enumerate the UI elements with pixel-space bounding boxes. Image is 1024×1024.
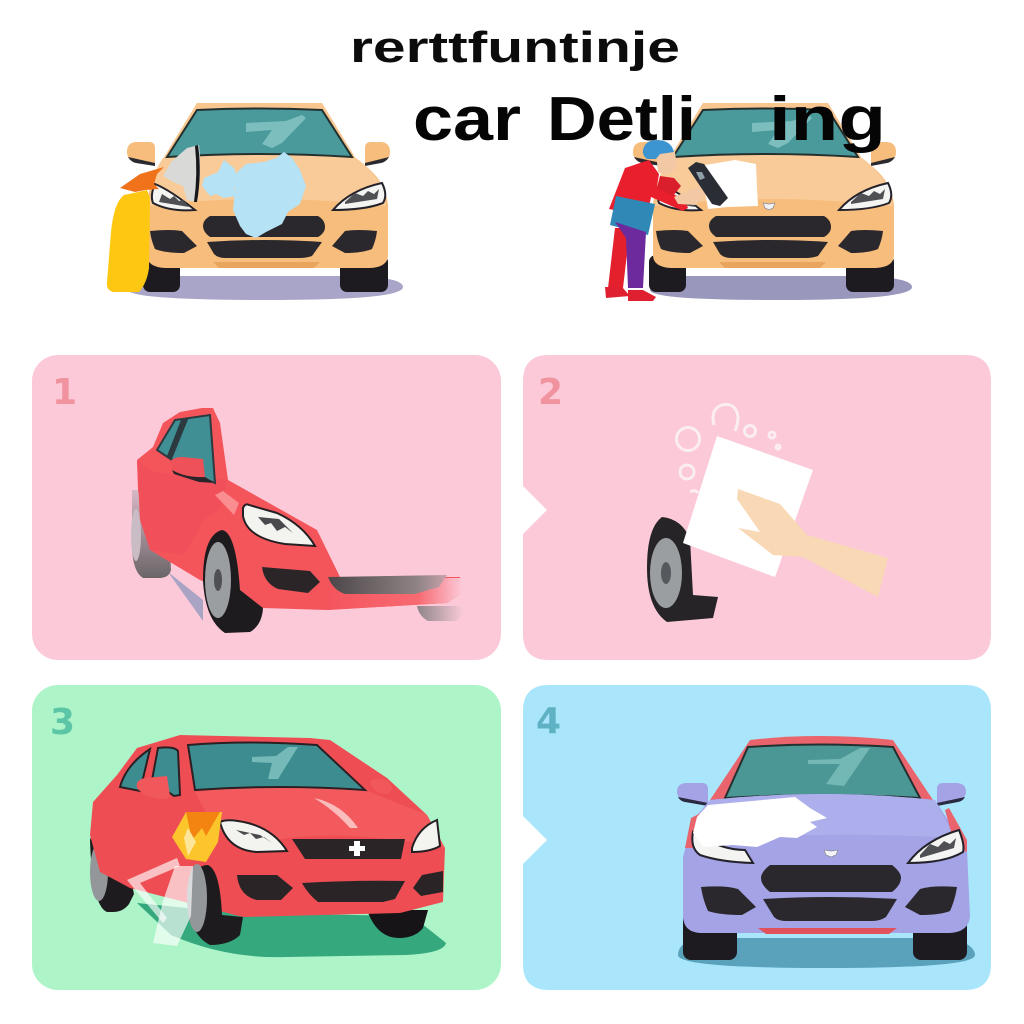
panel: step 3 bbox=[32, 685, 501, 990]
illustration: red car side bbox=[131, 408, 462, 633]
icon: spray bottle and applicator bbox=[107, 145, 200, 292]
panel: step 4 bbox=[523, 685, 991, 990]
illustration: car with person polishing bbox=[605, 103, 912, 301]
step number 1: 1 bbox=[52, 372, 77, 413]
title: car bbox=[413, 85, 521, 154]
foam on hood bbox=[202, 152, 306, 238]
title bbox=[413, 85, 886, 154]
step number 3: 3 bbox=[50, 702, 75, 743]
title: ing bbox=[769, 85, 886, 154]
icon: person polishing bbox=[605, 140, 728, 301]
panel: step 1 bbox=[32, 355, 501, 660]
illustration: car with spray bottle bbox=[107, 103, 403, 300]
title: Detli bbox=[547, 85, 696, 154]
step number 2: 2 bbox=[538, 372, 563, 413]
illustration: purple car with polish bbox=[677, 736, 975, 968]
illustration: wheel with cloth and hand bbox=[647, 404, 888, 622]
illustration: red car front three-quarter bbox=[90, 735, 446, 957]
polished patch bbox=[693, 797, 827, 847]
panel: step 2 bbox=[523, 355, 991, 660]
polished patch bbox=[704, 160, 758, 209]
subtitle: rerttfuntinje bbox=[350, 23, 680, 72]
step number 4: 4 bbox=[536, 701, 561, 742]
